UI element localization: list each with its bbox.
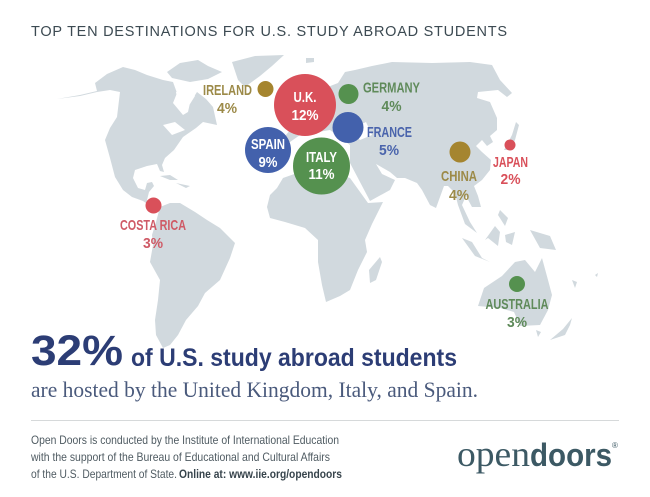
marker: U.K.: 12%: [292, 107, 318, 124]
marker: Costa Rica: [146, 198, 162, 214]
subheading: are hosted by the United Kingdom, Italy, and Spain.: [31, 377, 478, 402]
marker: U.K.: U.K.: [294, 89, 316, 106]
label: Ireland: [203, 82, 252, 117]
marker: Germany: [338, 84, 358, 104]
marker: U.K.: [274, 74, 336, 136]
marker: China: [450, 142, 470, 162]
marker: Ireland: [258, 81, 274, 97]
label: Ireland: IRELAND: [203, 82, 252, 99]
footer note: of the U.S. Department of State.: [31, 467, 177, 481]
label: China: CHINA: [441, 168, 477, 185]
marker: Italy: 11%: [308, 166, 334, 183]
marker: Italy: ITALY: [306, 149, 337, 166]
label: Germany: [363, 80, 420, 115]
footer note: Online at: www.iie.org/opendoors: [179, 467, 342, 481]
logo: opendoors: open: [457, 434, 530, 474]
marker: Australia: [509, 276, 525, 292]
white inland features: [163, 88, 372, 140]
headline statistic: [31, 327, 457, 375]
headline statistic: 32%: [31, 327, 123, 375]
marker: Italy: [293, 138, 350, 194]
label: China: 4%: [449, 187, 469, 204]
label: Japan: 2%: [500, 171, 520, 188]
label: China: [441, 168, 477, 204]
label: France: FRANCE: [367, 124, 412, 141]
label: Germany: GERMANY: [363, 80, 420, 96]
logo: opendoors: [457, 434, 618, 474]
label: Costa Rica: [120, 217, 186, 252]
world map: [57, 55, 598, 348]
label: Japan: [493, 154, 528, 188]
label: Ireland: 4%: [217, 100, 237, 117]
label: France: 5%: [379, 142, 399, 159]
marker: France: [332, 112, 364, 143]
label: Costa Rica: 3%: [143, 235, 163, 252]
logo: opendoors: doors: [530, 437, 612, 473]
title: TOP TEN DESTINATIONS FOR U.S. STUDY ABROAD STUDENTS: [31, 24, 507, 40]
footer note: Open Doors is conducted by the Institute of International Education: [31, 433, 339, 447]
headline statistic: of U.S. study abroad students: [131, 344, 457, 372]
label: Australia: 3%: [507, 314, 527, 331]
marker: Spain: [245, 127, 291, 173]
footer note: [30, 433, 342, 481]
label: Australia: AUSTRALIA: [486, 296, 549, 313]
label: Germany: 4%: [382, 98, 402, 115]
label: France: [367, 124, 412, 159]
marker: Japan: [504, 140, 516, 150]
label: Costa Rica: COSTA RICA: [120, 217, 186, 234]
label: Australia: [486, 296, 549, 331]
footer note: with the support of the Bureau of Educational and Cultural Affairs: [30, 450, 330, 464]
logo: opendoors: ®: [612, 441, 618, 450]
label: Japan: JAPAN: [493, 154, 528, 171]
marker: Spain: SPAIN: [251, 136, 285, 153]
marker: Spain: 9%: [258, 154, 278, 171]
